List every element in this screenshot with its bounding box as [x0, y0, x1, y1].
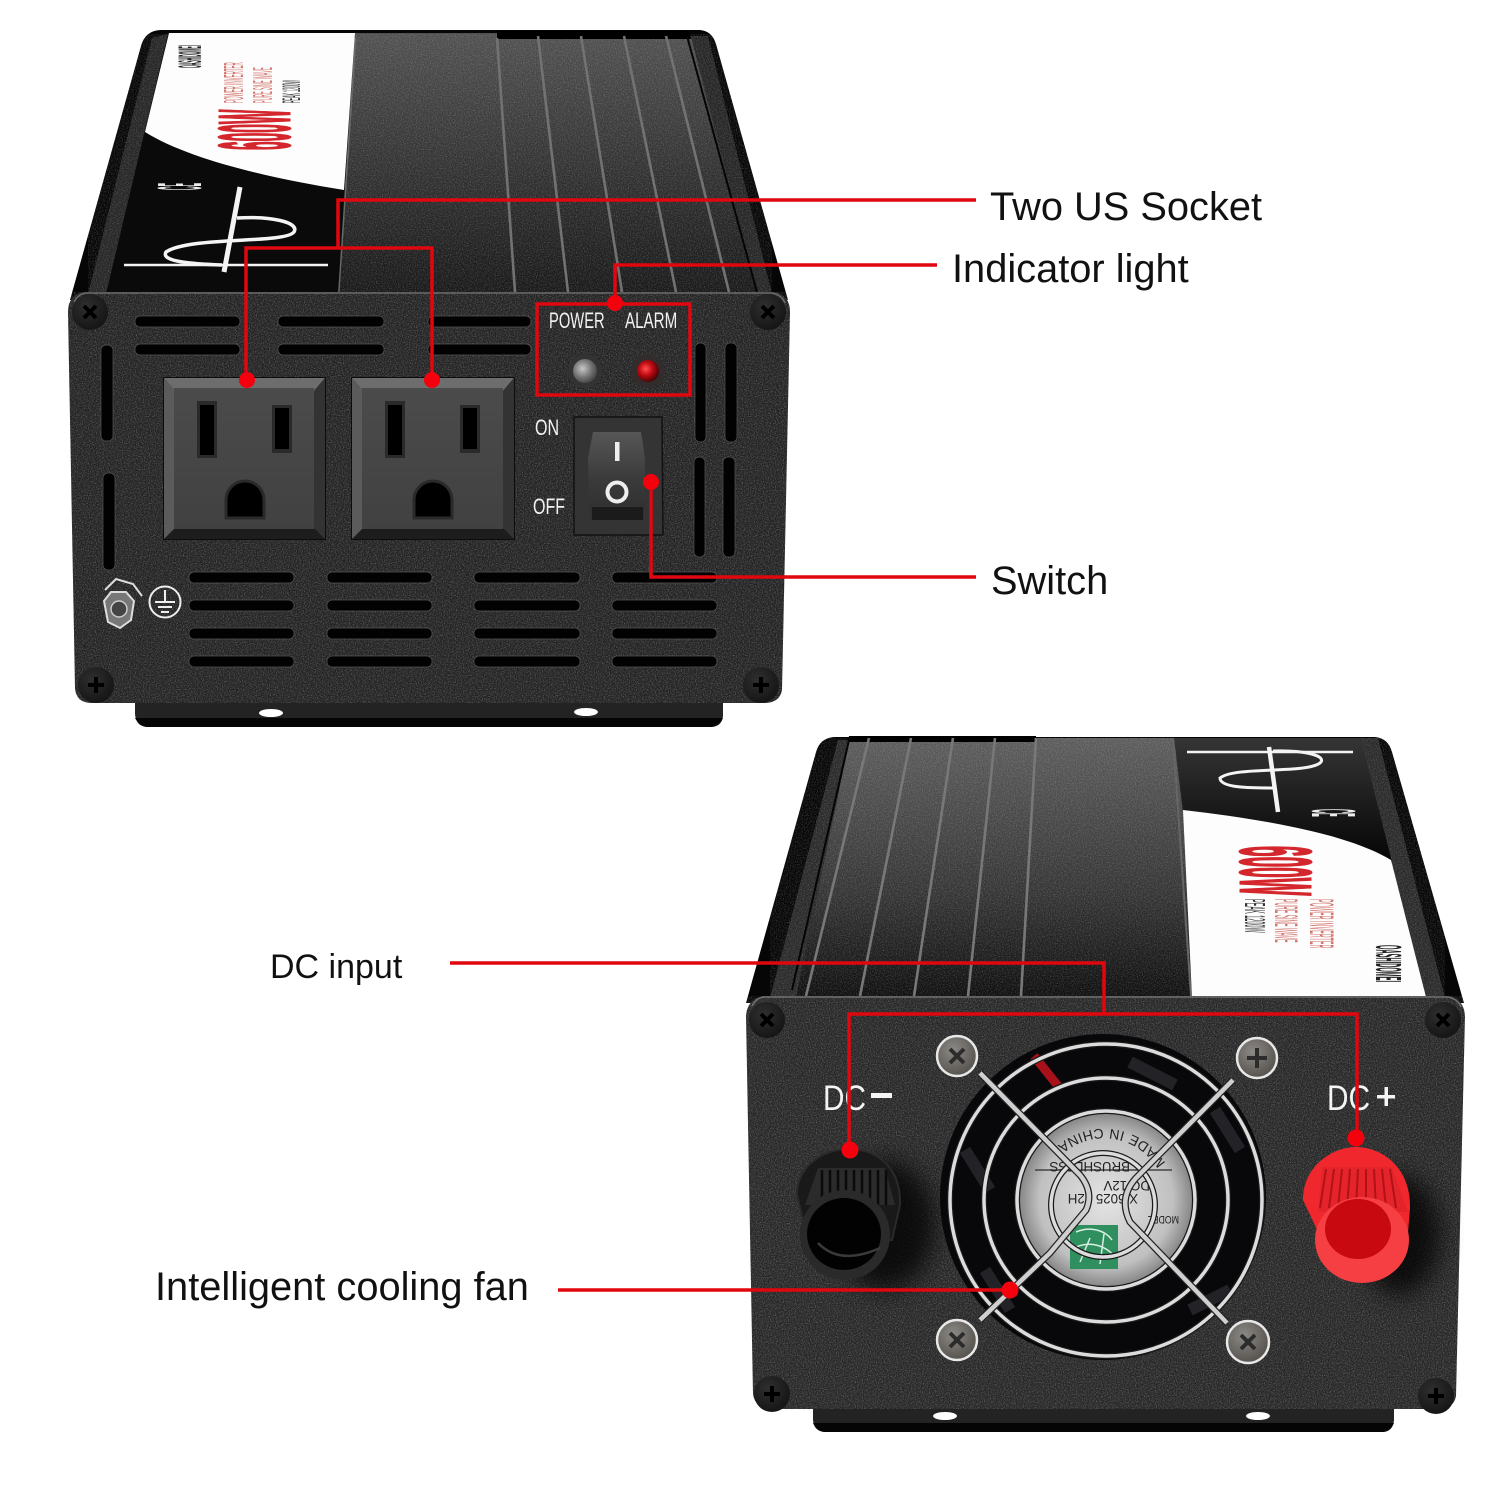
- fan: sticker text: BRUSHLESS: [1050, 1159, 1130, 1174]
- bottom unit: corner bolts: [749, 1002, 1461, 1414]
- top unit: label 600W: 600W: [200, 109, 311, 150]
- top unit: mounting foot: [135, 695, 723, 727]
- red DC terminal: [1303, 1147, 1440, 1295]
- bottom unit: label lines: [1238, 899, 1407, 982]
- fan: wire guard rings: [950, 1044, 1262, 1356]
- top unit: label lines: PEAK 1200W: [278, 80, 306, 103]
- top unit: housing top surface: [70, 30, 788, 300]
- callout: Intelligent cooling fan: [155, 1265, 1018, 1309]
- bottom unit: label lines: PEAK 1200W: [1238, 899, 1270, 933]
- top unit: black label area: [106, 33, 355, 294]
- fan: wire cross: [980, 1073, 1233, 1323]
- fan: guard screws: [937, 1036, 1277, 1363]
- fan: sticker text: MADE IN CHINA: [1058, 1128, 1165, 1168]
- bottom unit: label lines: POWER INVERTER: [1302, 899, 1339, 948]
- switch labels: OFF: [533, 496, 565, 520]
- switch labels: ON: [535, 417, 559, 441]
- ground terminal: [104, 579, 142, 628]
- fan: sticker text: X 6025 12H: [1068, 1191, 1138, 1206]
- rocker switch: [574, 417, 663, 535]
- bottom unit: label area: [1174, 738, 1426, 997]
- callout: Two US Socket: Two US Socket: [990, 185, 1262, 229]
- top unit: sine wave logo: [124, 187, 328, 272]
- LED alarm: [631, 354, 665, 388]
- panel labels POWER and ALARM: POWER: [549, 308, 605, 333]
- cooling fan: [936, 1034, 1278, 1364]
- panel labels POWER and ALARM: [549, 308, 677, 334]
- top unit: front panel: [68, 292, 790, 703]
- top unit: label lines: OASHIDOMEI: [171, 45, 208, 68]
- bottom unit: housing top surface: [746, 736, 1464, 1003]
- bottom unit: label 600W: 600W: [1219, 846, 1330, 896]
- fan: green sticker logo: [1070, 1225, 1118, 1269]
- fan: body and hub: [940, 1034, 1266, 1360]
- fan: sticker text: MODEL: [1147, 1213, 1179, 1225]
- top unit: small CE mark: CE: [146, 183, 215, 190]
- DC minus label: DC: [823, 1079, 866, 1118]
- DC minus label: [823, 1079, 892, 1118]
- callout: Indicator light: [537, 247, 1189, 395]
- bottom unit: small CE mark: CE: [1298, 809, 1367, 817]
- bottom inverter unit: [746, 736, 1465, 1432]
- callout: Two US Socket: [239, 185, 1262, 388]
- callout: DC input: DC input: [270, 948, 403, 986]
- DC plus label: DC: [1327, 1079, 1370, 1118]
- US socket right: [351, 377, 515, 540]
- fan: sticker text: [1050, 1128, 1179, 1225]
- callout: Switch: Switch: [991, 559, 1108, 603]
- fan: sticker text: DC 12V: [1103, 1178, 1150, 1193]
- top unit: ventilation slots: [101, 316, 737, 667]
- bottom unit: label lines: PURE SINE WAVE: [1268, 899, 1304, 943]
- bottom unit: sine wave logo: [1187, 747, 1353, 812]
- switch labels: [533, 417, 565, 520]
- callout: Intelligent cooling fan: Intelligent cooling fan: [155, 1265, 529, 1309]
- panel labels POWER and ALARM: ALARM: [625, 309, 677, 334]
- bottom unit: label lines: OASHIDOMEI: [1368, 945, 1407, 982]
- top inverter unit: [68, 30, 790, 727]
- ground symbol: [150, 586, 180, 618]
- callout: Indicator light: Indicator light: [952, 247, 1189, 291]
- black DC terminal: [797, 1149, 935, 1290]
- US socket left: [163, 377, 326, 540]
- LED power: [568, 354, 602, 388]
- bottom unit: mounting foot: [813, 1400, 1394, 1432]
- top unit: label lines: POWER INVERTER: [219, 62, 250, 103]
- top unit: label lines: PURE SINE WAVE: [248, 67, 279, 103]
- top unit: label lines: [171, 45, 306, 103]
- callout: Switch: [643, 474, 1108, 603]
- DC plus label: [1327, 1079, 1395, 1118]
- bottom unit: front panel: [746, 996, 1465, 1409]
- top unit: corner bolts: [72, 294, 786, 703]
- callout: DC input: [270, 948, 1364, 1158]
